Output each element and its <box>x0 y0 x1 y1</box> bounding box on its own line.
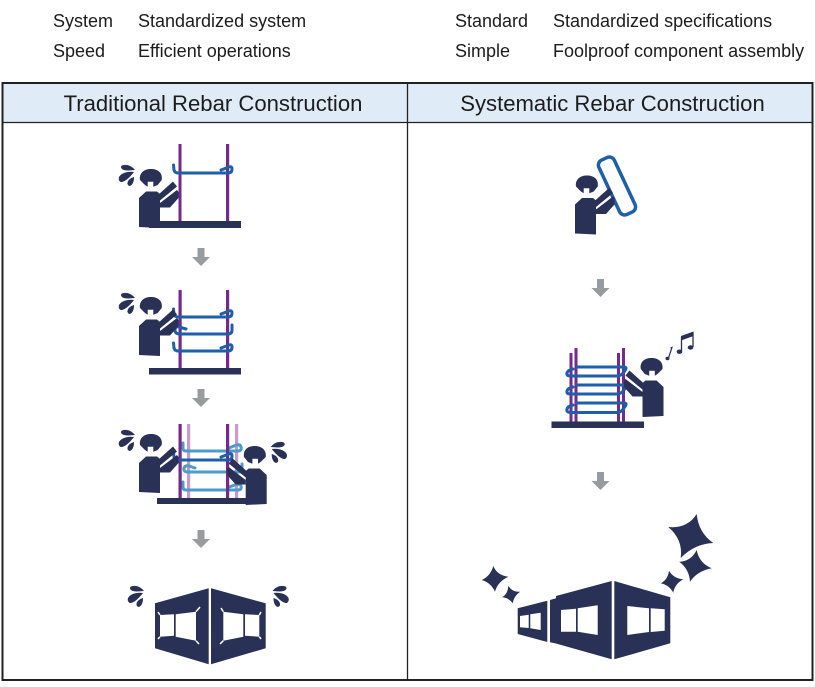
step 1: single worker places one hoop <box>119 144 241 228</box>
step 1: worker lifts pre-assembled cage <box>575 155 637 234</box>
legend: system: System <box>53 11 113 31</box>
step 3: two workers, offset rebar <box>119 424 287 505</box>
icon: sparkles <box>482 514 713 603</box>
heading: systematic <box>408 84 812 122</box>
legend: standard <box>455 11 772 31</box>
legend: speed <box>53 41 291 61</box>
result: clean building <box>482 514 713 659</box>
heading: traditional: Traditional Rebar Construction <box>64 91 362 116</box>
result: cracked building <box>128 586 289 664</box>
arrow <box>192 248 210 266</box>
legend: simple: Simple <box>455 41 510 61</box>
legend: speed: Speed <box>53 41 105 61</box>
legend: system: Standardized system <box>138 11 306 31</box>
legend: standard: Standard <box>455 11 528 31</box>
legend: system <box>53 11 306 31</box>
arrow <box>592 472 610 490</box>
heading: systematic: Systematic Rebar Construction <box>460 91 765 116</box>
heading: traditional <box>4 84 408 122</box>
arrow <box>192 389 210 407</box>
step 2: single worker places more hoops <box>119 290 241 374</box>
legend: standard: Standardized specifications <box>553 11 772 31</box>
legend: speed: Efficient operations <box>138 41 291 61</box>
arrow <box>592 279 610 297</box>
legend: simple: Foolproof component assembly <box>553 41 804 61</box>
icon: music notes <box>666 332 694 360</box>
step 2: happy worker fixes cage <box>552 332 694 428</box>
arrow <box>192 530 210 548</box>
